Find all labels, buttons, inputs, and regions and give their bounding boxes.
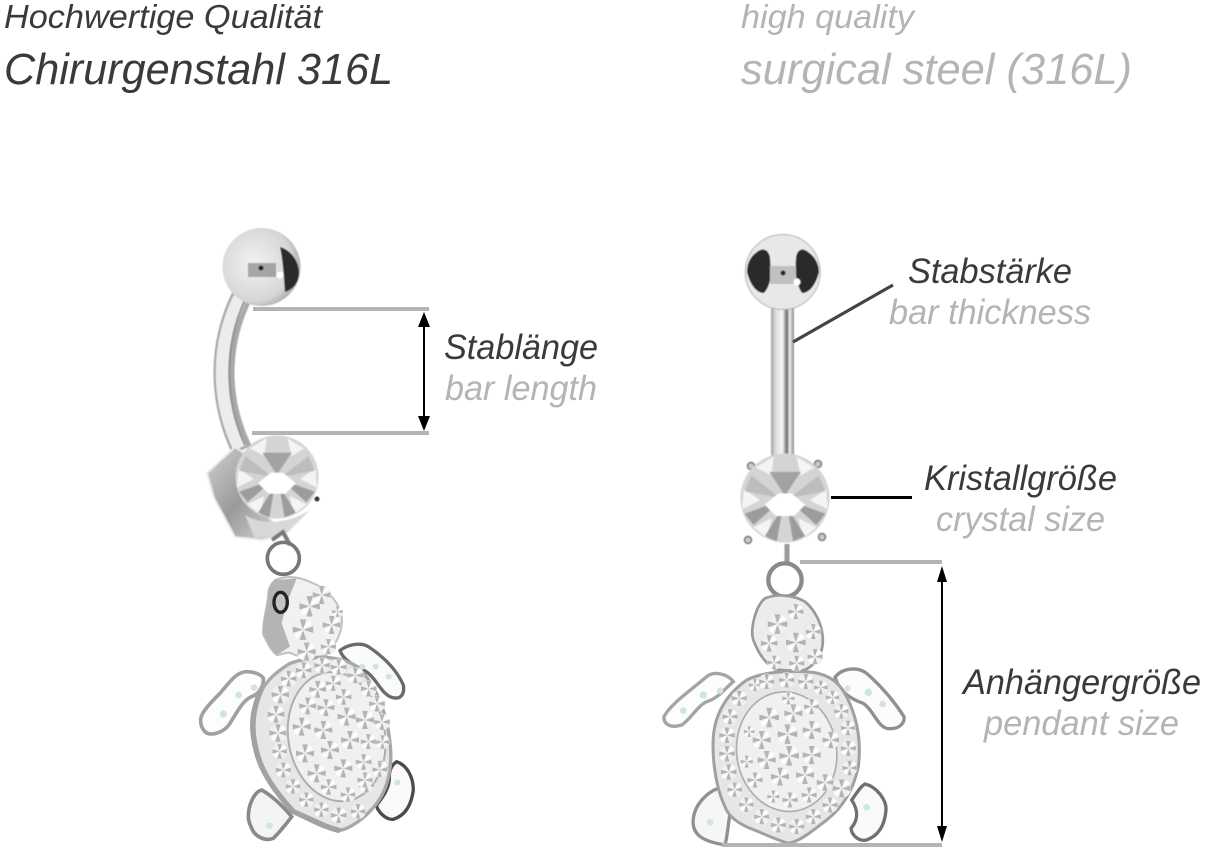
icon: eye (274, 592, 287, 612)
label: Kristallgröße: Kristallgröße (924, 459, 1117, 498)
icon: inner shell (729, 685, 845, 818)
icon: pendant link (784, 544, 790, 562)
icon: head (752, 595, 823, 671)
icon: inner shell (278, 664, 396, 809)
icon: shell (252, 657, 391, 831)
icon: curved bar reflection (229, 300, 245, 445)
label: Anhängergröße: Anhängergröße (961, 663, 1201, 702)
label: pendant size: pendant size (983, 704, 1179, 743)
icon: top left flipper (664, 674, 733, 726)
piercing: right front view (740, 234, 830, 562)
label: Stabstärke: Stabstärke (908, 252, 1072, 291)
icon: curved bar (224, 296, 242, 450)
measure: bar length bottom line (252, 431, 429, 435)
icon: setting base (245, 510, 310, 538)
icon: curved bar highlight (223, 298, 240, 448)
piercing: left side view (207, 228, 320, 545)
icon: prong (314, 496, 320, 502)
icon: shell (713, 671, 859, 843)
icon: ring (267, 542, 299, 574)
icon: head (263, 577, 342, 657)
measure: pendant bottom line (722, 843, 942, 847)
arrow: bar length (418, 312, 430, 431)
icon: bottom left flipper (693, 788, 730, 845)
label: crystal size: crystal size (936, 500, 1105, 539)
icon: shell metal edge (253, 688, 340, 831)
line: crystal size pointer (831, 496, 912, 499)
measure: pendant top line (800, 560, 942, 564)
piercing: right turtle pendant (664, 563, 904, 845)
crystals on right turtle (719, 604, 857, 835)
icon: bottom right flipper (851, 784, 886, 840)
icon: top right flipper (340, 644, 404, 698)
icon: top left flipper (201, 672, 263, 734)
icon: bottom left flipper (248, 790, 292, 839)
icon: crystal (235, 435, 319, 519)
icon: top ball (745, 234, 820, 310)
label: Stablänge: Stablänge (444, 328, 598, 367)
line: bar thickness pointer (793, 285, 893, 342)
heading: surgical steel (316L): surgical steel (316L) (741, 45, 1132, 94)
heading: Chirurgenstahl 316L: Chirurgenstahl 316L (4, 45, 393, 94)
icon: top right flipper (835, 669, 904, 729)
opal dots on flippers (220, 664, 400, 829)
icon: crystal (740, 453, 830, 543)
icon: ring (768, 563, 802, 597)
icon: crystal prongs (744, 460, 826, 544)
opal dots on flippers (680, 685, 886, 826)
icon: bottom right flipper (377, 762, 413, 819)
measure: bar length top line (253, 307, 429, 311)
icon: top ball (222, 228, 300, 306)
label: bar length: bar length (445, 369, 597, 408)
arrow: pendant size (937, 566, 947, 842)
label: bar thickness: bar thickness (889, 293, 1091, 332)
crystals on left turtle (267, 585, 390, 824)
icon: head metal side (263, 578, 297, 655)
piercing: left turtle pendant (201, 542, 413, 839)
icon: crystal setting (207, 447, 285, 540)
icon: pendant link (272, 532, 290, 545)
icon: straight bar (771, 305, 794, 460)
